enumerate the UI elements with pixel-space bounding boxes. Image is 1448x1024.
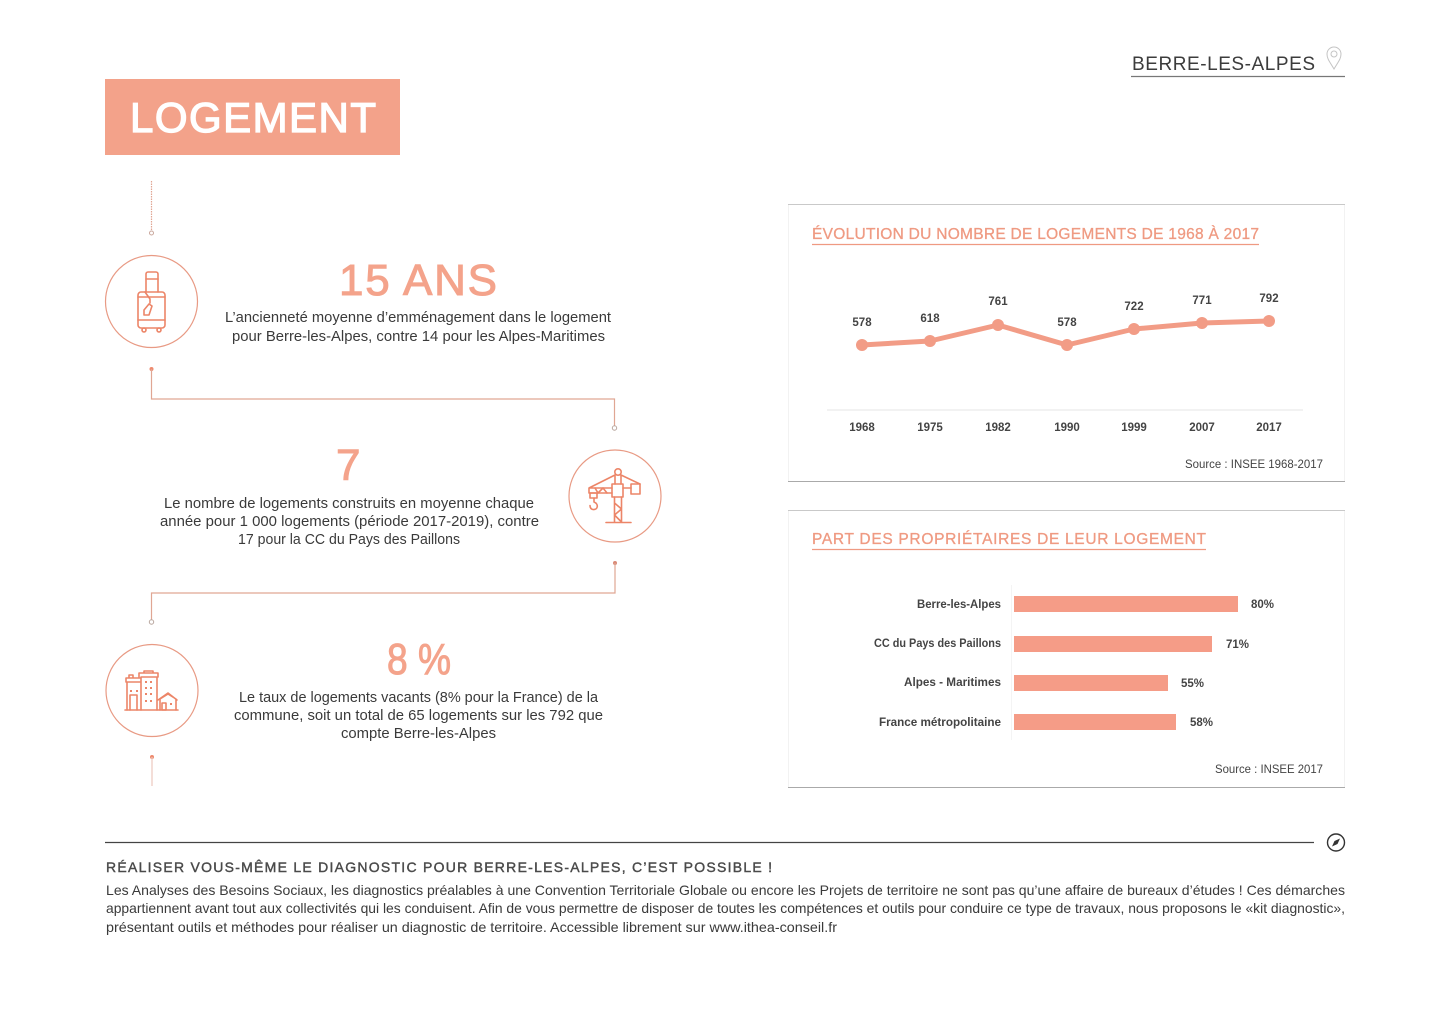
stat: 8 %: commune, soit un total de 65 logements sur les 792 que [234, 707, 603, 724]
line chart: 578 [852, 317, 872, 329]
line chart: 2017 [1256, 422, 1282, 434]
bar chart: Berre-les-Alpes [917, 599, 1001, 611]
stat: 15 ans: 15 ANS [339, 256, 497, 305]
heading: evolution: ÉVOLUTION DU NOMBRE DE LOGEMENTS DE 1968 À 2017 [812, 226, 1259, 243]
bar chart: CC du Pays des Paillons [874, 638, 1001, 650]
title banner [105, 79, 400, 155]
divider with compass [105, 834, 1344, 851]
line chart [827, 293, 1303, 434]
stat: 8 %: compte Berre-les-Alpes [341, 725, 496, 742]
connector: top [150, 181, 154, 235]
location header: BERRE-LES-ALPES [1132, 54, 1315, 75]
stat: 8 %: Le taux de logements vacants (8% pour la France) de la [239, 689, 599, 706]
line chart: 771 [1192, 295, 1212, 307]
source: Source : INSEE 1968-2017 [1185, 457, 1323, 471]
title banner: LOGEMENT [130, 94, 376, 141]
icon: map pin [1327, 47, 1341, 69]
line chart: 1999 [1121, 422, 1147, 434]
line chart: 792 [1259, 293, 1279, 305]
bar chart: France métropolitaine [879, 717, 1001, 729]
stat: 8 %: 8 % [387, 635, 451, 684]
connector: bottom [150, 755, 154, 786]
source: Source : INSEE 2017 [1215, 762, 1323, 776]
stat: 7: 7 [336, 441, 360, 490]
stat: 15 ans: pour Berre-les-Alpes, contre 14 pour les Alpes-Maritimes [232, 328, 605, 345]
stat: 15 ans [225, 256, 612, 345]
line chart: 1982 [985, 422, 1011, 434]
line chart: 1990 [1054, 422, 1080, 434]
connector: first to second [150, 367, 617, 430]
line chart: 722 [1124, 301, 1144, 313]
stat: 7: année pour 1 000 logements (période 2017-2019), contre [160, 513, 539, 530]
line chart: 578 [1057, 317, 1077, 329]
stat: 7 [160, 441, 539, 548]
connector: second to third [149, 561, 617, 624]
footer heading: RÉALISER VOUS-MÊME LE DIAGNOSTIC POUR BERRE-LES-ALPES, C’EST POSSIBLE ! [106, 859, 772, 875]
stat: 7: 17 pour la CC du Pays des Paillons [238, 531, 460, 548]
line chart: 1968 [849, 422, 875, 434]
bar chart: Alpes - Maritimes [904, 677, 1001, 689]
line chart: 761 [988, 296, 1008, 308]
line chart: 2007 [1189, 422, 1215, 434]
location header [1131, 47, 1345, 76]
icon: compass [1328, 834, 1344, 851]
line chart: 618 [920, 313, 940, 325]
bar chart [874, 585, 1274, 740]
footer text: Les Analyses des Besoins Sociaux, les diagnostics préalables à une Convention Territoriale Globale ou encore les Projets de territoire ne sont pas qu’une affaire de bureaux d’études ! Ces démarches [106, 882, 1345, 898]
footer text: appartiennent avant tout aux collectivités qui les conduisent. Afin de vous permettre de disposer de toutes les compétences et outils pour conduire ce type de travaux, nous proposons le «kit diagnostic», [106, 900, 1345, 916]
heading: owners: PART DES PROPRIÉTAIRES DE LEUR LOGEMENT [812, 531, 1207, 548]
bar chart: 55% [1181, 678, 1204, 690]
bar chart: 58% [1190, 717, 1213, 729]
footer text: présentant outils et méthodes pour réaliser un diagnostic de territoire. Accessible librement sur www.ithea-conseil.fr [106, 919, 837, 935]
stat: 15 ans: L’ancienneté moyenne d’emménagement dans le logement [225, 309, 612, 326]
bar chart: 71% [1226, 639, 1249, 651]
stat: 7: Le nombre de logements construits en moyenne chaque [164, 495, 534, 512]
icon: suitcase [106, 256, 198, 348]
footer text [106, 882, 1345, 935]
icon: buildings [106, 644, 198, 736]
panel: owners [788, 510, 1345, 788]
stat: 8 % [234, 635, 603, 742]
bar chart: 80% [1251, 599, 1274, 611]
line chart: 1975 [917, 422, 943, 434]
icon: crane [569, 450, 661, 542]
panel: housing evolution [788, 204, 1345, 482]
